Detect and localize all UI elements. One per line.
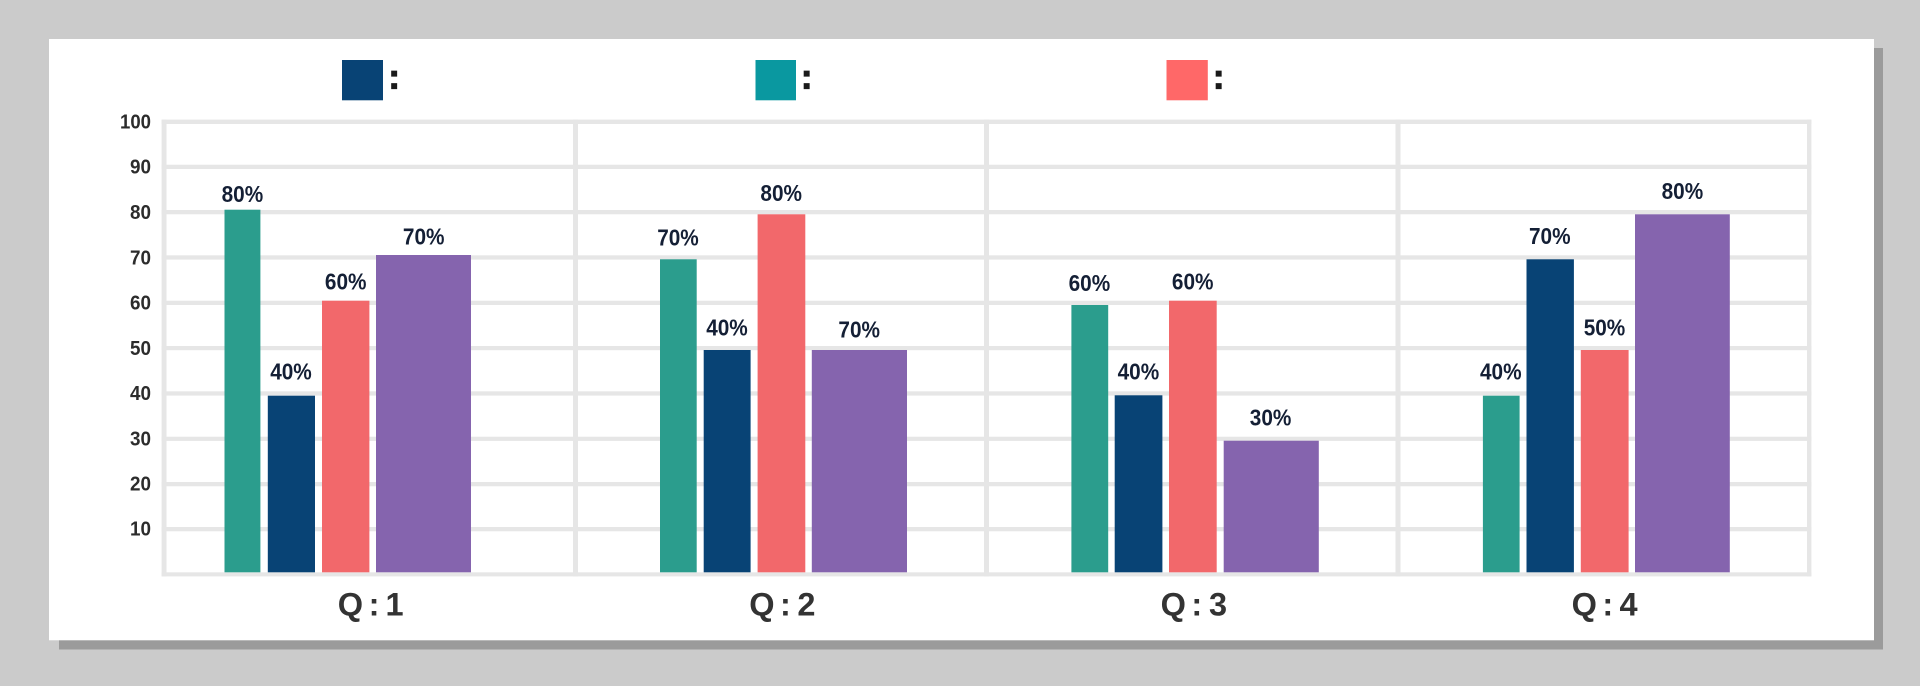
y axis labels: 20	[130, 473, 151, 496]
bar group: Q2: 70%	[657, 224, 699, 250]
bar group: Q4	[1480, 178, 1730, 572]
y axis labels: 40	[130, 382, 151, 405]
x axis labels: Q : 3	[1161, 587, 1227, 623]
y axis labels: 100	[120, 110, 151, 133]
bar group: Q1: 80%	[222, 181, 263, 207]
legend item: navy: :	[388, 58, 400, 96]
bar group: Q3: 40%	[1118, 359, 1159, 385]
y axis labels: 10	[130, 518, 151, 541]
x axis labels: Q : 1	[338, 587, 404, 623]
bar group: Q1: 70%	[403, 223, 445, 249]
bar group: Q2: 70%	[838, 317, 880, 343]
y axis labels: 90	[130, 156, 151, 179]
y axis labels: 80	[130, 201, 151, 224]
x axis labels: Q : 4	[1572, 587, 1638, 623]
bar group: Q4: 40%	[1480, 359, 1522, 385]
chart grid	[162, 120, 1811, 576]
legend item: coral	[1166, 58, 1224, 100]
bar group: Q4: 80%	[1662, 178, 1703, 204]
bar group: Q1	[222, 181, 471, 572]
y axis labels: 30	[130, 427, 151, 450]
legend item: navy	[342, 58, 400, 100]
legend item: coral: :	[1213, 58, 1224, 96]
y axis labels: 70	[130, 246, 151, 269]
bar group: Q4: 70%	[1529, 223, 1571, 249]
y axis labels	[120, 110, 151, 541]
legend item: teal	[756, 58, 812, 100]
bar group: Q1: 60%	[325, 268, 367, 294]
bar group: Q2	[657, 180, 907, 572]
bar group: Q3: 60%	[1172, 269, 1213, 295]
legend item: teal: :	[801, 58, 812, 96]
bar group: Q2: 80%	[760, 180, 802, 206]
bar group: Q3	[1069, 269, 1319, 572]
bar group: Q2: 40%	[706, 314, 748, 340]
x axis labels	[338, 587, 1638, 623]
bar group: Q4: 50%	[1584, 314, 1625, 340]
bar group: Q1: 40%	[270, 359, 312, 385]
x axis labels: Q : 2	[749, 587, 815, 623]
bar group: Q3: 60%	[1069, 270, 1110, 296]
y axis labels: 50	[130, 337, 151, 360]
y axis labels: 60	[130, 292, 151, 315]
legend	[342, 58, 1224, 100]
bar group: Q3: 30%	[1250, 404, 1291, 430]
